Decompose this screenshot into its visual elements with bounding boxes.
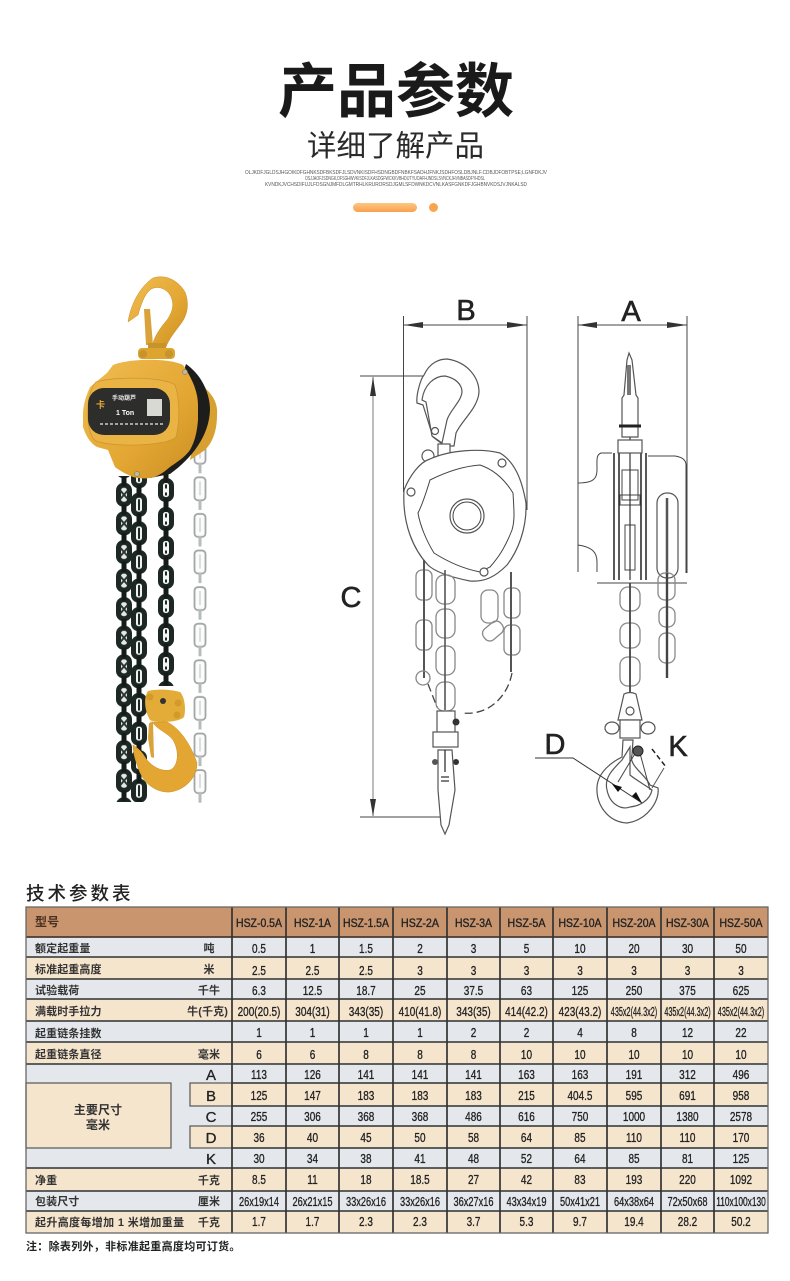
row: package size: 110x100x130 <box>716 1196 766 1209</box>
row: dimension A: A <box>206 1067 216 1084</box>
row: standard lift height: 3 <box>685 965 690 978</box>
top hook edge view <box>618 353 642 453</box>
row: net weight: 11 <box>307 1174 318 1187</box>
row: dimension B: 215 <box>518 1090 535 1103</box>
row: dimension K: 48 <box>468 1153 479 1166</box>
row: dimension C: C <box>206 1109 217 1126</box>
row: package size: 33x26x16 <box>346 1196 386 1209</box>
merged label: main dimensions: 毫米 <box>86 1117 110 1132</box>
row: dimension A: 141 <box>358 1069 374 1082</box>
hoist rear housing <box>190 388 217 460</box>
row: rated load: 1.5 <box>359 943 373 956</box>
row: hand pull at full load: 343(35) <box>456 1006 491 1019</box>
row: dimension K: 52 <box>521 1153 532 1166</box>
row: standard lift height: 3 <box>631 965 637 978</box>
row: rated load <box>26 937 768 957</box>
row: load chain falls: 起重链条挂数 <box>35 1026 102 1040</box>
row: test load: 250 <box>626 985 642 998</box>
row: dimension D <box>190 1126 768 1148</box>
row: extra weight per metre: 50.2 <box>731 1216 751 1229</box>
row: net weight <box>26 1168 768 1191</box>
dimension C <box>341 376 445 817</box>
bottom hook <box>133 722 197 792</box>
row: load chain falls: 2 <box>524 1027 529 1040</box>
row: extra weight per metre: 3.7 <box>467 1216 480 1229</box>
row: dimension D: 36 <box>253 1132 265 1145</box>
row: test load: 63 <box>521 985 532 998</box>
row: load chain diameter: 8 <box>417 1049 423 1062</box>
row: dimension K <box>206 1148 768 1168</box>
black rim <box>150 364 210 478</box>
row: package size: 包装尺寸 <box>35 1194 79 1208</box>
row: rated load: 0.5 <box>252 943 266 956</box>
row: test load: 37.5 <box>464 985 483 998</box>
specification table <box>26 907 768 1233</box>
dimension A: A <box>621 296 641 328</box>
row: dimension D: 170 <box>733 1132 749 1145</box>
row: dimension C: 750 <box>572 1111 588 1124</box>
row: extra weight per metre: 28.2 <box>678 1216 697 1229</box>
bottom hook block <box>145 690 185 722</box>
row: dimension C <box>206 1106 768 1126</box>
header row: HSZ-1A <box>294 916 331 930</box>
row: dimension C: 616 <box>518 1111 535 1124</box>
dimension B <box>404 295 527 510</box>
row: extra weight per metre: 起升高度每增加 1 米增加重量 <box>35 1215 184 1229</box>
small latin caption: OSJJAOFJSDNGK,DFSGHWVKISDFJLKASDGFWCKKVBHDIJTYUOAFHJNDSLSVNCKJHVNBASDFYHDSL <box>305 176 485 182</box>
row: extra weight per metre: 千克 <box>198 1215 220 1229</box>
row: rated load: 3 <box>471 943 476 956</box>
row: rated load: 吨 <box>203 941 215 955</box>
row: load chain falls: 1 <box>310 1027 315 1040</box>
row: dimension K: 85 <box>628 1153 640 1166</box>
lower hook: D <box>545 729 565 761</box>
header row: HSZ-20A <box>612 916 656 930</box>
row: load chain diameter: 6 <box>310 1049 315 1062</box>
header row: HSZ-0.5A <box>236 916 282 930</box>
merged label: main dimensions <box>26 1064 232 1168</box>
row: dimension C: 2578 <box>730 1111 752 1124</box>
row: dimension D: 110 <box>626 1132 642 1145</box>
title: 产品参数 <box>278 59 514 125</box>
row: load chain falls <box>26 1021 768 1042</box>
row: dimension A: 113 <box>251 1069 267 1082</box>
bottom hook latch <box>148 723 154 758</box>
subtitle: 详细了解产品 <box>307 130 484 163</box>
row: hand pull at full load: 423(43.2) <box>559 1006 602 1019</box>
row: dimension B <box>190 1083 768 1106</box>
row: package size: 50x41x21 <box>560 1196 600 1209</box>
row: load chain falls: 2 <box>471 1027 476 1040</box>
row: dimension D: 58 <box>468 1132 479 1145</box>
swivel <box>138 343 175 359</box>
row: standard lift height: 米 <box>203 962 215 976</box>
row: hand pull at full load: 200(20.5) <box>238 1006 281 1019</box>
row: dimension C: 486 <box>465 1111 482 1124</box>
row: dimension A: 312 <box>679 1069 696 1082</box>
row: rated load: 5 <box>524 943 529 956</box>
dimension C: C <box>341 582 361 614</box>
header row: HSZ-1.5A <box>343 916 389 930</box>
row: load chain falls: 8 <box>631 1027 637 1040</box>
row: rated load: 20 <box>628 943 640 956</box>
row: dimension C: 255 <box>251 1111 267 1124</box>
row: extra weight per metre: 9.7 <box>573 1216 587 1229</box>
row: dimension D: D <box>206 1130 217 1147</box>
merged label: main dimensions: 主要尺寸 <box>74 1102 122 1117</box>
row: dimension B: 183 <box>465 1090 482 1103</box>
row: load chain falls: 1 <box>363 1027 369 1040</box>
row: package size: 厘米 <box>198 1194 220 1208</box>
row: hand pull at full load: 410(41.8) <box>399 1006 442 1019</box>
header row: HSZ-5A <box>508 916 546 930</box>
row: hand pull at full load: 304(31) <box>295 1006 330 1019</box>
row: load chain diameter: 10 <box>521 1049 532 1062</box>
technical drawing: front view <box>535 296 688 823</box>
row: net weight: 83 <box>574 1174 586 1187</box>
row: net weight: 18.5 <box>410 1174 430 1187</box>
row: net weight: 千克 <box>198 1173 220 1187</box>
row: rated load: 2 <box>417 943 423 956</box>
row: dimension A: 141 <box>465 1069 482 1082</box>
top hook <box>128 277 187 347</box>
row: load chain diameter: 10 <box>628 1049 640 1062</box>
row: dimension C: 368 <box>358 1111 374 1124</box>
row: net weight: 42 <box>521 1174 532 1187</box>
row: rated load: 50 <box>735 943 747 956</box>
nameplate <box>88 388 170 435</box>
row: hand pull at full load: 435x2(44.3x2) <box>664 1006 711 1019</box>
row: dimension K: K <box>206 1151 216 1168</box>
row: test load: 6.3 <box>252 985 266 998</box>
row: hand pull at full load: 满载时手拉力 <box>35 1004 102 1018</box>
dimension A <box>578 296 687 573</box>
row: rated load: 30 <box>682 943 693 956</box>
row: dimension C: 1000 <box>623 1111 645 1124</box>
row: net weight: 18 <box>360 1174 372 1187</box>
row: dimension B: B <box>206 1088 216 1105</box>
dimension B: B <box>456 295 476 327</box>
row: test load: 千牛 <box>198 983 220 997</box>
header row: HSZ-3A <box>455 916 492 930</box>
row: test load: 12.5 <box>303 985 322 998</box>
row: extra weight per metre: 5.3 <box>520 1216 533 1229</box>
lower hook <box>535 692 688 823</box>
row: dimension B: 691 <box>679 1090 696 1103</box>
chain <box>620 573 675 695</box>
row: extra weight per metre <box>26 1211 768 1233</box>
row: dimension C: 1380 <box>676 1111 699 1124</box>
row: extra weight per metre: 1.7 <box>252 1216 266 1229</box>
row: dimension K: 38 <box>360 1153 372 1166</box>
row: dimension A: 163 <box>572 1069 588 1082</box>
header row: HSZ-10A <box>558 916 602 930</box>
lower hook: K <box>668 731 688 763</box>
header row <box>26 907 768 937</box>
small latin caption: KVNDKJVCHSDIFUJLFDSGNJMFDLGMTRHLKRURORSDJGMLSFDWNKDCVNLKASFGNKDFJGHBNVKDSJVJNKALSD <box>265 182 527 188</box>
row: dimension K: 81 <box>682 1153 693 1166</box>
row: test load: 25 <box>414 985 426 998</box>
decorative orange pill and dot <box>353 203 438 212</box>
row: dimension D: 85 <box>574 1132 586 1145</box>
row: load chain falls: 1 <box>256 1027 262 1040</box>
row: test load: 125 <box>572 985 588 998</box>
silver hand chain <box>192 447 208 803</box>
row: rated load: 10 <box>574 943 586 956</box>
row: test load <box>26 979 768 999</box>
row: dimension B: 958 <box>733 1090 749 1103</box>
row: dimension A: 126 <box>304 1069 321 1082</box>
row: load chain diameter: 起重链条直径 <box>35 1047 102 1061</box>
row: standard lift height: 2.5 <box>252 965 266 978</box>
row: dimension D: 40 <box>307 1132 318 1145</box>
row: package size: 33x26x16 <box>400 1196 440 1209</box>
row: standard lift height: 3 <box>417 965 423 978</box>
load chains <box>114 474 176 802</box>
row: dimension K: 41 <box>414 1153 426 1166</box>
row: standard lift height: 标准起重高度 <box>35 962 102 976</box>
row: dimension K: 64 <box>574 1153 586 1166</box>
nameplate: 1 Ton <box>116 410 134 417</box>
row: extra weight per metre: 1.7 <box>306 1216 319 1229</box>
row: hand pull at full load: 435x2(44.3x2) <box>718 1006 764 1019</box>
row: standard lift height: 3 <box>471 965 476 978</box>
row: load chain falls: 22 <box>735 1027 747 1040</box>
row: dimension B: 595 <box>626 1090 642 1103</box>
row: load chain diameter <box>26 1042 768 1064</box>
row: net weight: 193 <box>626 1174 642 1187</box>
row: dimension B: 147 <box>304 1090 321 1103</box>
hoist body <box>83 360 198 478</box>
row: extra weight per metre: 19.4 <box>624 1216 644 1229</box>
row: dimension K: 125 <box>733 1153 749 1166</box>
product photo: yellow chain hoist <box>83 277 217 803</box>
row: dimension K: 34 <box>307 1153 318 1166</box>
row: package size: 36x27x16 <box>454 1196 494 1209</box>
row: load chain diameter: 8 <box>471 1049 476 1062</box>
row: package size: 43x34x19 <box>506 1196 546 1209</box>
row: test load: 375 <box>679 985 696 998</box>
row: package size: 26x21x15 <box>292 1196 332 1209</box>
row: load chain falls: 4 <box>577 1027 583 1040</box>
hook latch <box>144 309 153 345</box>
row: extra weight per metre: 2.3 <box>359 1216 373 1229</box>
row: standard lift height: 3 <box>577 965 583 978</box>
row: package size: 26x19x14 <box>239 1196 279 1209</box>
row: dimension K: 30 <box>253 1153 265 1166</box>
screws <box>134 370 188 476</box>
row: dimension B: 404.5 <box>568 1090 592 1103</box>
row: rated load: 1 <box>310 943 315 956</box>
chains <box>416 560 520 713</box>
row: test load: 试验载荷 <box>35 983 79 997</box>
row: dimension B: 183 <box>358 1090 374 1103</box>
row: dimension B: 125 <box>251 1090 267 1103</box>
row: test load: 18.7 <box>356 985 376 998</box>
row: load chain diameter: 8 <box>363 1049 369 1062</box>
row: hand pull at full load: 牛(千克) <box>187 1004 228 1018</box>
technical drawing: side view <box>341 295 527 834</box>
row: hand pull at full load <box>26 999 768 1021</box>
row: dimension A: 163 <box>518 1069 535 1082</box>
row: dimension D: 110 <box>680 1132 695 1145</box>
row: package size <box>26 1191 768 1211</box>
row: standard lift height: 2.5 <box>306 965 319 978</box>
row: dimension A: 191 <box>626 1069 642 1082</box>
row: net weight: 27 <box>468 1174 479 1187</box>
table title: 技术参数表 <box>26 883 134 904</box>
hoist outline <box>404 359 526 581</box>
row: dimension D: 64 <box>521 1132 532 1145</box>
row: net weight: 8.5 <box>252 1174 266 1187</box>
header row: HSZ-30A <box>666 916 709 930</box>
row: standard lift height: 3 <box>738 965 744 978</box>
row: net weight: 220 <box>679 1174 696 1187</box>
row: load chain diameter: 10 <box>574 1049 586 1062</box>
small latin caption <box>245 170 547 188</box>
row: load chain diameter: 10 <box>735 1049 747 1062</box>
nameplate: 手动葫芦 <box>112 394 136 402</box>
row: net weight: 净重 <box>35 1173 57 1187</box>
row: load chain diameter: 毫米 <box>198 1047 220 1061</box>
row: hand pull at full load: 435x2(44.3x2) <box>611 1006 657 1019</box>
row: dimension A: 141 <box>412 1069 428 1082</box>
row: net weight: 1092 <box>730 1174 752 1187</box>
row: load chain diameter: 6 <box>256 1049 262 1062</box>
row: load chain falls: 12 <box>682 1027 693 1040</box>
row: dimension A: 496 <box>733 1069 749 1082</box>
row: load chain falls: 1 <box>417 1027 423 1040</box>
lower hook side <box>432 711 460 834</box>
row: standard lift height <box>26 957 768 979</box>
row: package size: 72x50x68 <box>668 1196 708 1209</box>
row: hand pull at full load: 343(35) <box>349 1006 383 1019</box>
row: rated load: 额定起重量 <box>35 941 90 955</box>
side oval hand wheel <box>657 493 678 578</box>
row: dimension D: 50 <box>414 1132 426 1145</box>
row: dimension A <box>206 1064 768 1084</box>
row: dimension C: 368 <box>412 1111 428 1124</box>
row: standard lift height: 2.5 <box>359 965 373 978</box>
header row: HSZ-2A <box>401 916 439 930</box>
row: dimension B: 183 <box>412 1090 428 1103</box>
row: package size: 64x38x64 <box>614 1196 654 1209</box>
row: standard lift height: 3 <box>524 965 529 978</box>
small latin caption: OLJKDFJGLDSJHGOIKDFGHNKSDFBKSDFJLSDVNKISDFHSDNGBDFNBKFSADHJFNKJSDHFOSLDBJNLF.CDBJDFOBTPSE;LGNFDKJV <box>245 170 547 176</box>
nameplate: 卡 <box>96 399 105 410</box>
row: hand pull at full load: 414(42.2) <box>505 1006 548 1019</box>
header row: 型号 <box>35 915 59 929</box>
footnote: 注：除表列外，非标准起重高度均可订货。 <box>26 1239 241 1253</box>
housing outline <box>578 430 687 583</box>
header row: HSZ-50A <box>720 916 762 930</box>
row: test load: 625 <box>733 985 749 998</box>
row: dimension C: 306 <box>304 1111 321 1124</box>
raised panel edge <box>88 378 179 445</box>
row: dimension D: 45 <box>360 1132 372 1145</box>
row: load chain diameter: 10 <box>682 1049 693 1062</box>
row: extra weight per metre: 2.3 <box>413 1216 427 1229</box>
